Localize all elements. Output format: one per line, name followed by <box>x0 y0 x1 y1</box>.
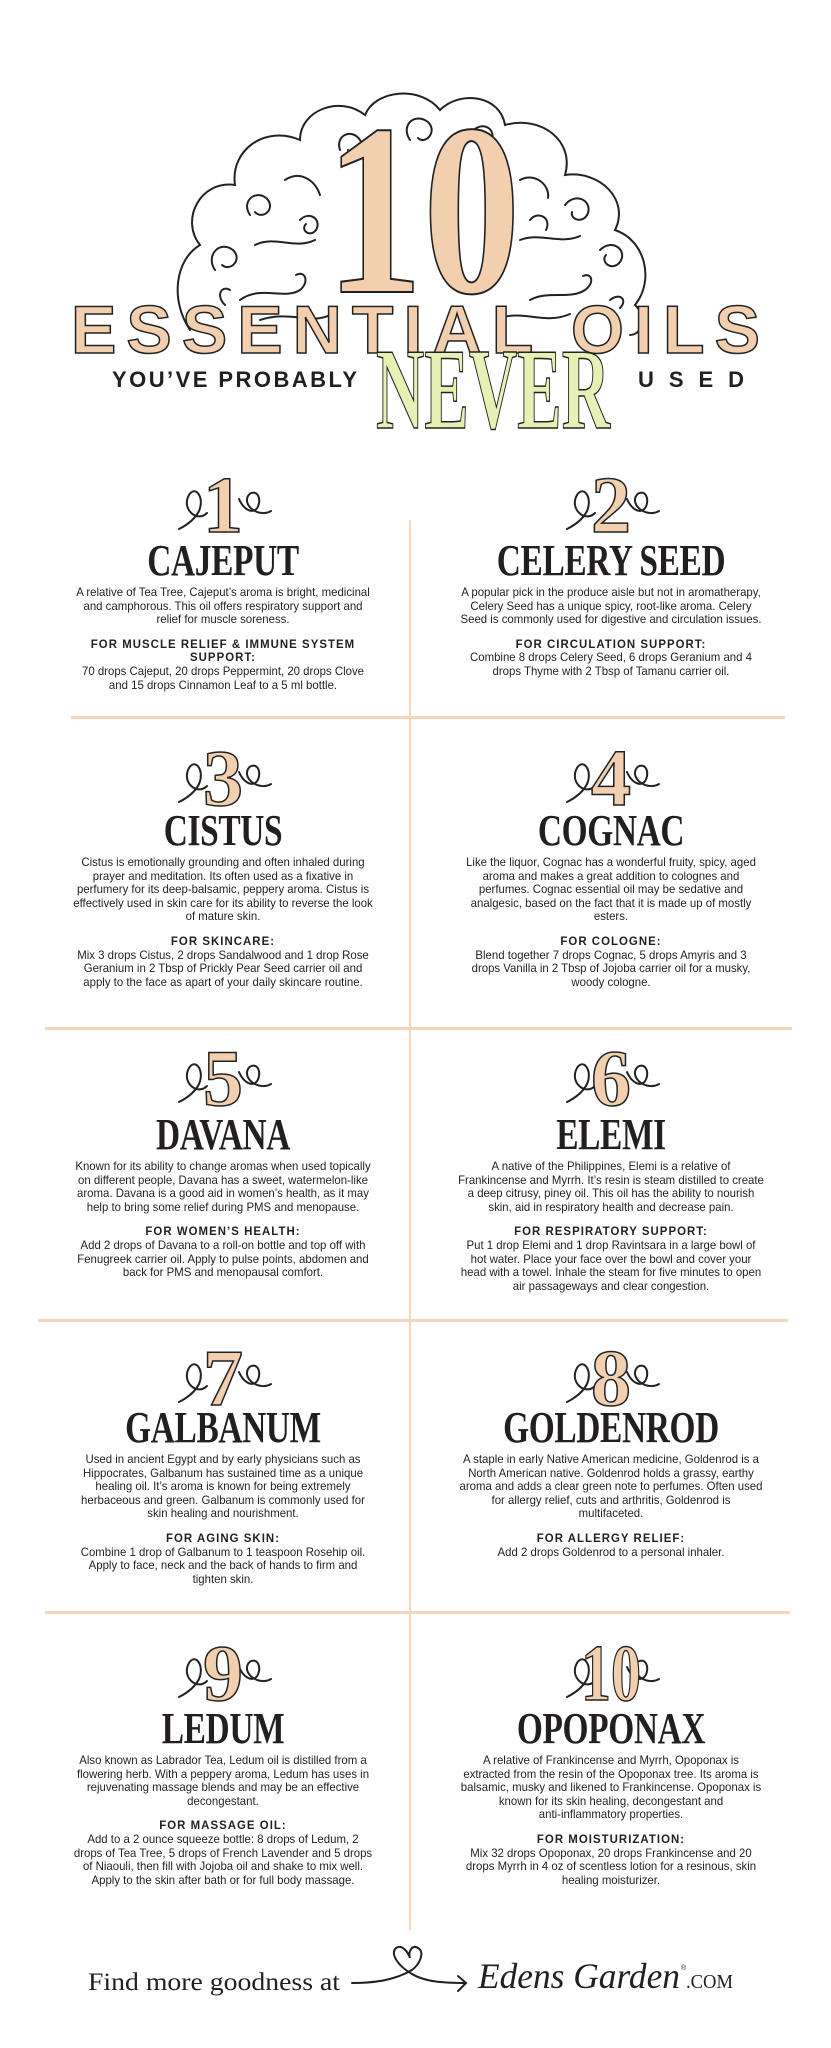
panel: davana: Known for its ability to change aromas when used topically <box>75 1159 371 1173</box>
panel: goldenrod: aroma and adds a clear green note to perfumes. Often used <box>460 1479 762 1493</box>
panel: elemi: FOR RESPIRATORY SUPPORT: <box>514 1224 708 1238</box>
panel: galbanum: healing oil. It’s aroma is known for being extremely <box>95 1479 351 1493</box>
panel: goldenrod: GOLDENROD <box>503 1403 719 1452</box>
panel: ledum: FOR MASSAGE OIL: <box>159 1818 287 1832</box>
panel: cognac: drops Vanilla in 2 Tbsp of Jojoba carrier oil for a musky, <box>472 961 750 975</box>
panel: goldenrod: multifaceted. Add 2 drops Goldenrod to a personal inhaler. <box>498 1506 724 1559</box>
subtitle you've probably: YOU’VE PROBABLY <box>112 367 357 392</box>
panel: cistus: prayer and meditation. Its often used as a fixative in <box>93 869 353 883</box>
panel: celery seed: CELERY SEED <box>497 536 725 585</box>
panel: galbanum: Apply to face, neck and the back of hands to firm and <box>89 1558 357 1572</box>
number 2: 2 <box>591 462 631 550</box>
panel: elemi: Frankincense and Myrrh. It’s resin is steam distilled to create <box>458 1173 764 1187</box>
panel: cajeput <box>76 536 370 692</box>
vertical divider <box>409 520 411 1930</box>
panel: opoponax: healing moisturizer. <box>562 1873 660 1887</box>
panel: cistus: perfumery for its deep-balsamic, peppery aroma. Cistus is <box>77 882 369 896</box>
panel: ledum: LEDUM <box>162 1704 284 1753</box>
panel: opoponax: FOR MOISTURIZATION: <box>537 1832 685 1846</box>
number 9 <box>179 1630 271 1718</box>
panel: cognac: Like the liquor, Cognac has a wonderful fruity, spicy, aged <box>466 855 756 869</box>
panel: ledum: Apply to the skin after bath or for full body massage. <box>91 1873 354 1887</box>
panel: davana: DAVANA <box>156 1110 290 1159</box>
footer <box>88 1946 733 1996</box>
panel: elemi: ELEMI <box>556 1110 666 1159</box>
panel: cognac: aroma and makes a great addition to colognes and <box>483 869 739 883</box>
panel: ledum: of Niaouli, then fill with Jojoba oil and shake to mix well. <box>83 1859 363 1873</box>
number 7: 7 <box>203 1335 243 1423</box>
panel: goldenrod: for allergy relief, cuts and arthritis, Goldenrod is <box>492 1493 730 1507</box>
panel: galbanum: tighten skin. <box>193 1572 253 1586</box>
panel: cognac: COGNAC <box>538 806 684 855</box>
panel: davana: aroma. Davana is a good aid in women’s health, as it may <box>77 1186 369 1200</box>
panel: ledum: drops of Tea Tree, 5 drops of French Lavender and 5 drops <box>74 1846 372 1860</box>
number 10: 10 <box>581 1630 641 1718</box>
panel: davana <box>75 1110 371 1279</box>
panel: celery seed <box>460 536 761 678</box>
panel: cajeput: relief for muscle soreness. 70 drops Cajeput, 20 drops Peppermint, 20 drops Clove <box>82 612 364 678</box>
panel: cajeput: and 15 drops Cinnamon Leaf to a 5 ml bottle. <box>109 678 337 692</box>
panel: elemi: air passageways and clear congestion. <box>513 1279 709 1293</box>
panel: cistus: apply to the face as apart of your daily skincare routine. <box>83 975 363 989</box>
number 7 <box>179 1335 271 1423</box>
number 1: 1 <box>203 462 243 550</box>
footer: ® <box>681 1964 687 1972</box>
panel: ledum: flowering herb. With a peppery aroma, Ledum has uses in <box>77 1767 369 1781</box>
panel: galbanum: Hippocrates, Galbanum has sustained time as a unique <box>83 1466 363 1480</box>
footer: .COM <box>686 1971 733 1993</box>
panel: opoponax <box>461 1704 761 1887</box>
panel: galbanum: skin healing and nourishment. Combine 1 drop of Galbanum to 1 teaspoon Rosehip oil. <box>81 1506 365 1559</box>
panel: davana: on different people, Davana has a sweet, watermelon-like <box>78 1173 368 1187</box>
panel: opoponax: extracted from the resin of the Opoponax tree. Its aroma is <box>463 1767 759 1781</box>
panel: cognac <box>466 806 756 989</box>
panel: cognac: perfumes. Cognac essential oil may be sedative and <box>479 882 743 896</box>
panel: cistus: of mature skin. Mix 3 drops Cistus, 2 drops Sandalwood and 1 drop Rose <box>77 909 369 962</box>
number 3: 3 <box>203 735 243 823</box>
panel: cistus: effectively used in skin care for its ability to reverse the look <box>73 896 373 910</box>
number 6 <box>567 1035 659 1123</box>
number 8: 8 <box>591 1335 631 1423</box>
panel: celery seed: FOR CIRCULATION SUPPORT: <box>516 637 706 651</box>
panel: cognac: woody cologne. <box>571 975 651 989</box>
panel: cognac: esters. Blend together 7 drops Cognac, 5 drops Amyris and 3 <box>475 909 747 962</box>
panel: galbanum: herbaceous and green. Galbanum is commonly used for <box>81 1493 365 1507</box>
panel: ledum <box>74 1704 372 1887</box>
number 5 <box>179 1035 271 1123</box>
number 6: 6 <box>591 1035 631 1123</box>
panel: opoponax: anti-inflammatory properties. Mix 32 drops Opoponax, 20 drops Frankincense and 20 <box>470 1807 752 1860</box>
number 3 <box>179 735 271 823</box>
panel: galbanum: Used in ancient Egypt and by early physicians such as <box>85 1452 361 1466</box>
panel: goldenrod <box>460 1403 762 1559</box>
panel: opoponax: known for its skin healing, decongestant and <box>499 1794 723 1808</box>
panel: elemi <box>458 1110 764 1293</box>
panel: opoponax: OPOPONAX <box>517 1704 705 1753</box>
panel: goldenrod: North American native. Goldenrod holds a grassy, earthy <box>468 1466 754 1480</box>
panel: goldenrod: FOR ALLERGY RELIEF: <box>537 1531 685 1545</box>
panel: opoponax: drops Myrrh in 4 oz of scentless lotion for a resinous, skin <box>466 1859 756 1873</box>
panel: cistus: Geranium in 2 Tbsp of Prickly Pear Seed carrier oil and <box>84 961 362 975</box>
panel: ledum: Also known as Labrador Tea, Ledum oil is distilled from a <box>79 1753 367 1767</box>
panel: elemi: A native of the Philippines, Elemi is a relative of <box>492 1159 730 1173</box>
number 5: 5 <box>203 1035 243 1123</box>
panel: celery seed: Celery Seed has a unique spicy, root-like aroma. Celery <box>470 599 752 613</box>
panel: elemi: skin, aid in respiratory health and decrease pain. Put 1 drop Elemi and 1 drop Ravintsara in a large bowl of <box>467 1200 755 1252</box>
panel: celery seed: A popular pick in the produce aisle but not in aromatherapy, <box>461 585 761 599</box>
panel: galbanum: FOR AGING SKIN: <box>166 1531 280 1545</box>
number 4 <box>567 735 659 823</box>
panel: cistus: FOR SKINCARE: <box>171 934 275 948</box>
essential oils heading: ESSENTIAL OILS <box>71 292 760 368</box>
logo: edens garden: Edens Garden <box>477 1956 680 1996</box>
panel: celery seed: Seed is commonly used for digestive and circulation issues. Combine 8 drops Celery Seed, 6 drops Geranium and 4 <box>460 612 761 664</box>
subtitle used: USED <box>638 367 744 392</box>
number 2 <box>567 462 659 550</box>
icon: heart arrow <box>352 1947 466 1991</box>
panel: cajeput: and camphorous. This oil offers respiratory support and <box>83 599 363 613</box>
big number 10: 10 <box>326 74 520 345</box>
panel: davana: help to bring some relief during PMS and menopause. Add 2 drops of Davana to a roll-on bottle and top off with <box>80 1200 365 1252</box>
number 4: 4 <box>591 735 631 823</box>
panel: ledum: rejuvenating massage blends and may be an effective <box>87 1780 359 1794</box>
number 8 <box>567 1335 659 1423</box>
panel: davana: back for PMS and menopausal comfort. <box>123 1265 323 1279</box>
panel: davana: Fenugreek carrier oil. Apply to pulse points, abdomen and <box>77 1252 369 1266</box>
panel: cistus: CISTUS <box>164 806 282 855</box>
panel: elemi: a deep citrusy, piney oil. This oil has the ability to nourish <box>468 1186 754 1200</box>
panel: elemi: hot water. Place your face over the bowl and cover your <box>471 1252 751 1266</box>
number 9: 9 <box>203 1630 243 1718</box>
panel: cajeput: FOR MUSCLE RELIEF & IMMUNE SYSTEM <box>91 637 355 651</box>
panel: cajeput: A relative of Tea Tree, Cajeput’s aroma is bright, medicinal <box>76 585 370 599</box>
panel: galbanum <box>81 1403 365 1586</box>
panel: opoponax: balsamic, musky and likened to Frankincense. Opoponax is <box>461 1780 761 1794</box>
panel: celery seed: drops Thyme with 2 Tbsp of Tamanu carrier oil. <box>493 664 729 678</box>
header swirl cloud <box>178 94 645 335</box>
panel: cajeput: CAJEPUT <box>147 536 299 585</box>
header: 10 essential oils title <box>71 74 760 440</box>
panel: cistus <box>73 806 373 989</box>
panel: davana: FOR WOMEN’S HEALTH: <box>145 1224 301 1238</box>
panel: cajeput: SUPPORT: <box>190 650 256 664</box>
panel: cistus: Cistus is emotionally grounding and often inhaled during <box>81 855 365 869</box>
number 1 <box>179 462 271 550</box>
panel: cognac: analgesic, based on the fact that it is made up of mostly <box>471 896 751 910</box>
panel: cognac: FOR COLOGNE: <box>560 934 662 948</box>
panel: ledum: decongestant. Add to a 2 ounce squeeze bottle: 8 drops of Ledum, 2 <box>87 1794 359 1846</box>
panel: galbanum: GALBANUM <box>125 1403 321 1452</box>
footer text: Find more goodness at <box>88 1969 340 1996</box>
panel: opoponax: A relative of Frankincense and Myrrh, Opoponax is <box>483 1753 739 1767</box>
panel: elemi: head with a towel. Inhale the steam for five minutes to open <box>461 1265 761 1279</box>
panel: goldenrod: A staple in early Native American medicine, Goldenrod is a <box>463 1452 759 1466</box>
